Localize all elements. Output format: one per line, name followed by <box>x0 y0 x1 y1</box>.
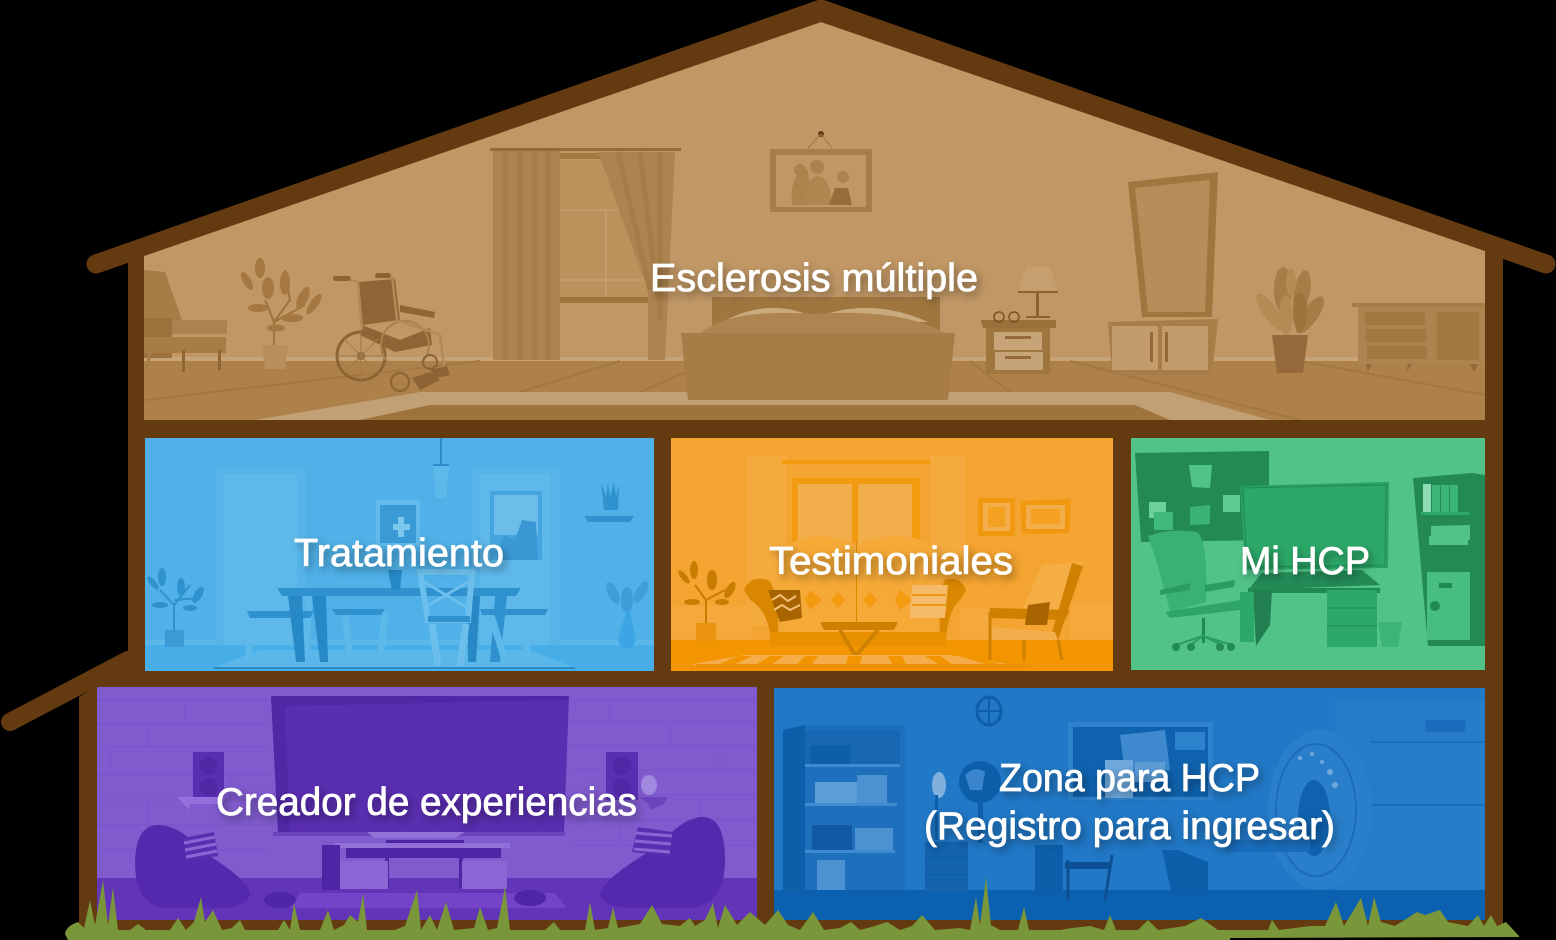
desk <box>1240 570 1380 647</box>
office chair <box>1148 531 1240 651</box>
wall shelf with plant <box>584 482 634 522</box>
sofa <box>744 537 966 646</box>
panel: Mi HCP (office) <box>1131 438 1485 670</box>
monitor <box>1240 482 1389 570</box>
mirror <box>1128 172 1218 317</box>
floor <box>97 878 757 920</box>
lower roof <box>10 660 128 722</box>
desk and chair <box>1035 845 1112 900</box>
wall lamp <box>977 697 1001 725</box>
armchair <box>988 562 1083 660</box>
left door <box>215 467 306 645</box>
label: Tratamiento: Tratamiento <box>294 532 504 575</box>
striped rug <box>692 655 1033 668</box>
potted plant right <box>1256 267 1324 373</box>
bed <box>681 297 955 400</box>
panel: Esclerosis múltiple (bedroom) <box>144 22 1485 420</box>
nightstand with lamp and glasses <box>981 267 1058 374</box>
right door with window <box>480 474 550 640</box>
coffee table <box>820 622 898 655</box>
family picture <box>770 131 872 212</box>
cork board <box>1135 451 1269 542</box>
label: Mi HCP: Mi HCP <box>1240 540 1370 583</box>
left plant <box>146 568 206 647</box>
floor <box>671 640 1113 671</box>
armchair <box>144 270 227 372</box>
cabinet <box>1108 319 1218 375</box>
main roof <box>96 9 1546 264</box>
window <box>782 460 930 544</box>
side drawers <box>925 842 968 892</box>
wall shelves <box>177 775 668 810</box>
rug <box>213 650 575 668</box>
vase with leaves <box>606 581 648 648</box>
lamp and globe <box>932 761 1001 843</box>
panel: Tratamiento (dining room) <box>145 438 654 671</box>
label: Creador de experiencias: Creador de experiencias <box>216 781 637 824</box>
panel: Zona para HCP (medical study) <box>774 688 1485 920</box>
right beanbag <box>600 817 725 908</box>
floor <box>145 645 654 671</box>
floor <box>144 361 1485 420</box>
rug <box>255 392 1270 420</box>
pin board <box>1068 722 1213 800</box>
label: Zona para HCP (Registro para ingresar) <box>924 757 1335 848</box>
panel: Testimoniales (living room) <box>671 438 1113 671</box>
cardboard box <box>1162 850 1208 895</box>
TV <box>271 696 569 838</box>
grass <box>65 877 1519 940</box>
label: Zona para HCP (Registro para ingresar): Zona para HCP <box>999 757 1260 800</box>
bookshelf <box>783 725 905 892</box>
brick lines <box>97 700 757 850</box>
curtains <box>747 456 965 626</box>
label: Esclerosis múltiple: Esclerosis múltiple <box>650 257 978 300</box>
label: Zona para HCP (Registro para ingresar): (Registro para ingresar) <box>924 805 1335 848</box>
floor <box>774 890 1485 920</box>
MRI machine <box>1225 700 1485 890</box>
curtains and window <box>490 148 681 360</box>
hanging lamp <box>433 438 449 498</box>
potted plant <box>677 561 738 641</box>
panel: Creador de experiencias (gaming room) <box>97 687 757 920</box>
speakers <box>193 752 638 800</box>
dining table and chairs <box>240 560 548 666</box>
waste bin <box>1378 622 1402 647</box>
wheelchair <box>333 273 450 391</box>
bookcase <box>1413 473 1485 646</box>
potted plant left <box>239 258 324 369</box>
left beanbag <box>135 825 250 908</box>
gaming desk <box>322 840 510 890</box>
rug and controllers <box>264 890 567 908</box>
dresser <box>1352 303 1485 373</box>
medicine cabinet <box>376 500 420 546</box>
balustrade <box>671 602 1113 639</box>
wall frames <box>978 498 1071 536</box>
label: Testimoniales: Testimoniales <box>769 540 1013 583</box>
